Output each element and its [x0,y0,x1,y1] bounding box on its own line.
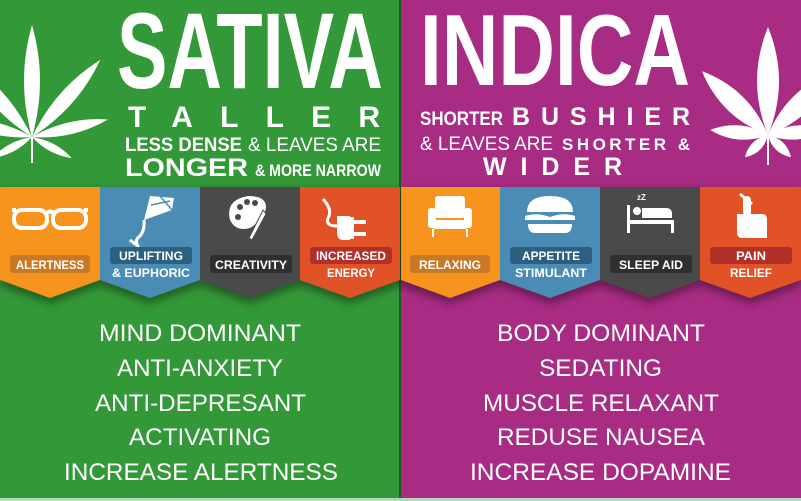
icon: burger [525,196,575,233]
icon: armchair [428,196,472,237]
text: less dense [125,135,382,182]
list: indica effects: INCREASE DOPAMINE [470,459,731,486]
banner: appetite [500,187,600,298]
banner: pain relief: PAIN [736,249,766,263]
list: indica effects: REDUSE NAUSEA [497,424,705,451]
icon: bed: zZ [637,193,646,202]
icon: sativa leaf [0,25,109,163]
text: less dense: LONGER [125,154,248,182]
list: indica effects: SEDATING [539,355,662,382]
icon: indica leaf [695,27,801,165]
list: sativa effects: ANTI-ANXIETY [117,355,283,382]
banner: energy: ENERGY [327,266,375,280]
icon: glasses [12,210,88,228]
banner: sleep aid: SLEEP AID [619,258,683,272]
banner: energy: INCREASED [316,249,386,263]
list: sativa effects [64,320,338,486]
text: shorter bushier: & LEAVES ARE [420,134,553,155]
subtitle: TALLER: TALLER [128,101,380,134]
banner: creativity: CREATIVITY [215,258,287,272]
banner: energy [300,187,400,298]
list: indica effects: MUSCLE RELAXANT [483,390,719,417]
text: shorter bushier: BUSHIER [512,103,690,131]
banner: uplifting [100,187,200,298]
banner: pain relief [700,187,801,298]
banner shadows [0,190,801,304]
text: shorter bushier: WIDER [483,153,622,181]
text: shorter bushier: SHORTER [420,109,503,130]
list: sativa effects: INCREASE ALERTNESS [64,459,338,486]
text: shorter bushier [420,103,690,181]
list: sativa effects: MIND DOMINANT [99,320,301,347]
text: less dense: LESS DENSE [125,135,242,156]
banner: pain relief: RELIEF [730,266,772,280]
text: shorter bushier: SHORTER & [562,135,690,154]
banner: relaxing: RELAXING [419,258,481,272]
panel: indica background [400,0,801,501]
list: sativa effects: ANTI-DEPRESANT [95,390,306,417]
banner: sleep aid [600,187,700,298]
banner: appetite: STIMULANT [515,266,588,280]
list: sativa effects: ACTIVATING [129,424,271,451]
list: indica effects [470,320,731,486]
banner: alertness [0,187,100,298]
banner: uplifting: & EUPHORIC [112,266,190,280]
list: indica effects: BODY DOMINANT [497,320,705,347]
icon: kite [130,196,174,246]
banner: uplifting: UPLIFTING [119,249,183,263]
icon: plug [323,199,366,240]
text: less dense: & MORE NARROW [255,161,382,180]
banner: creativity [200,187,300,298]
text: less dense: & LEAVES ARE [248,135,381,156]
banner: appetite: APPETITE [522,249,580,263]
panel: sativa background [0,0,400,501]
banner: alertness: ALERTNESS [16,258,84,272]
banner: relaxing [401,187,500,298]
icon: finger [737,194,767,238]
icon: palette [229,196,266,240]
